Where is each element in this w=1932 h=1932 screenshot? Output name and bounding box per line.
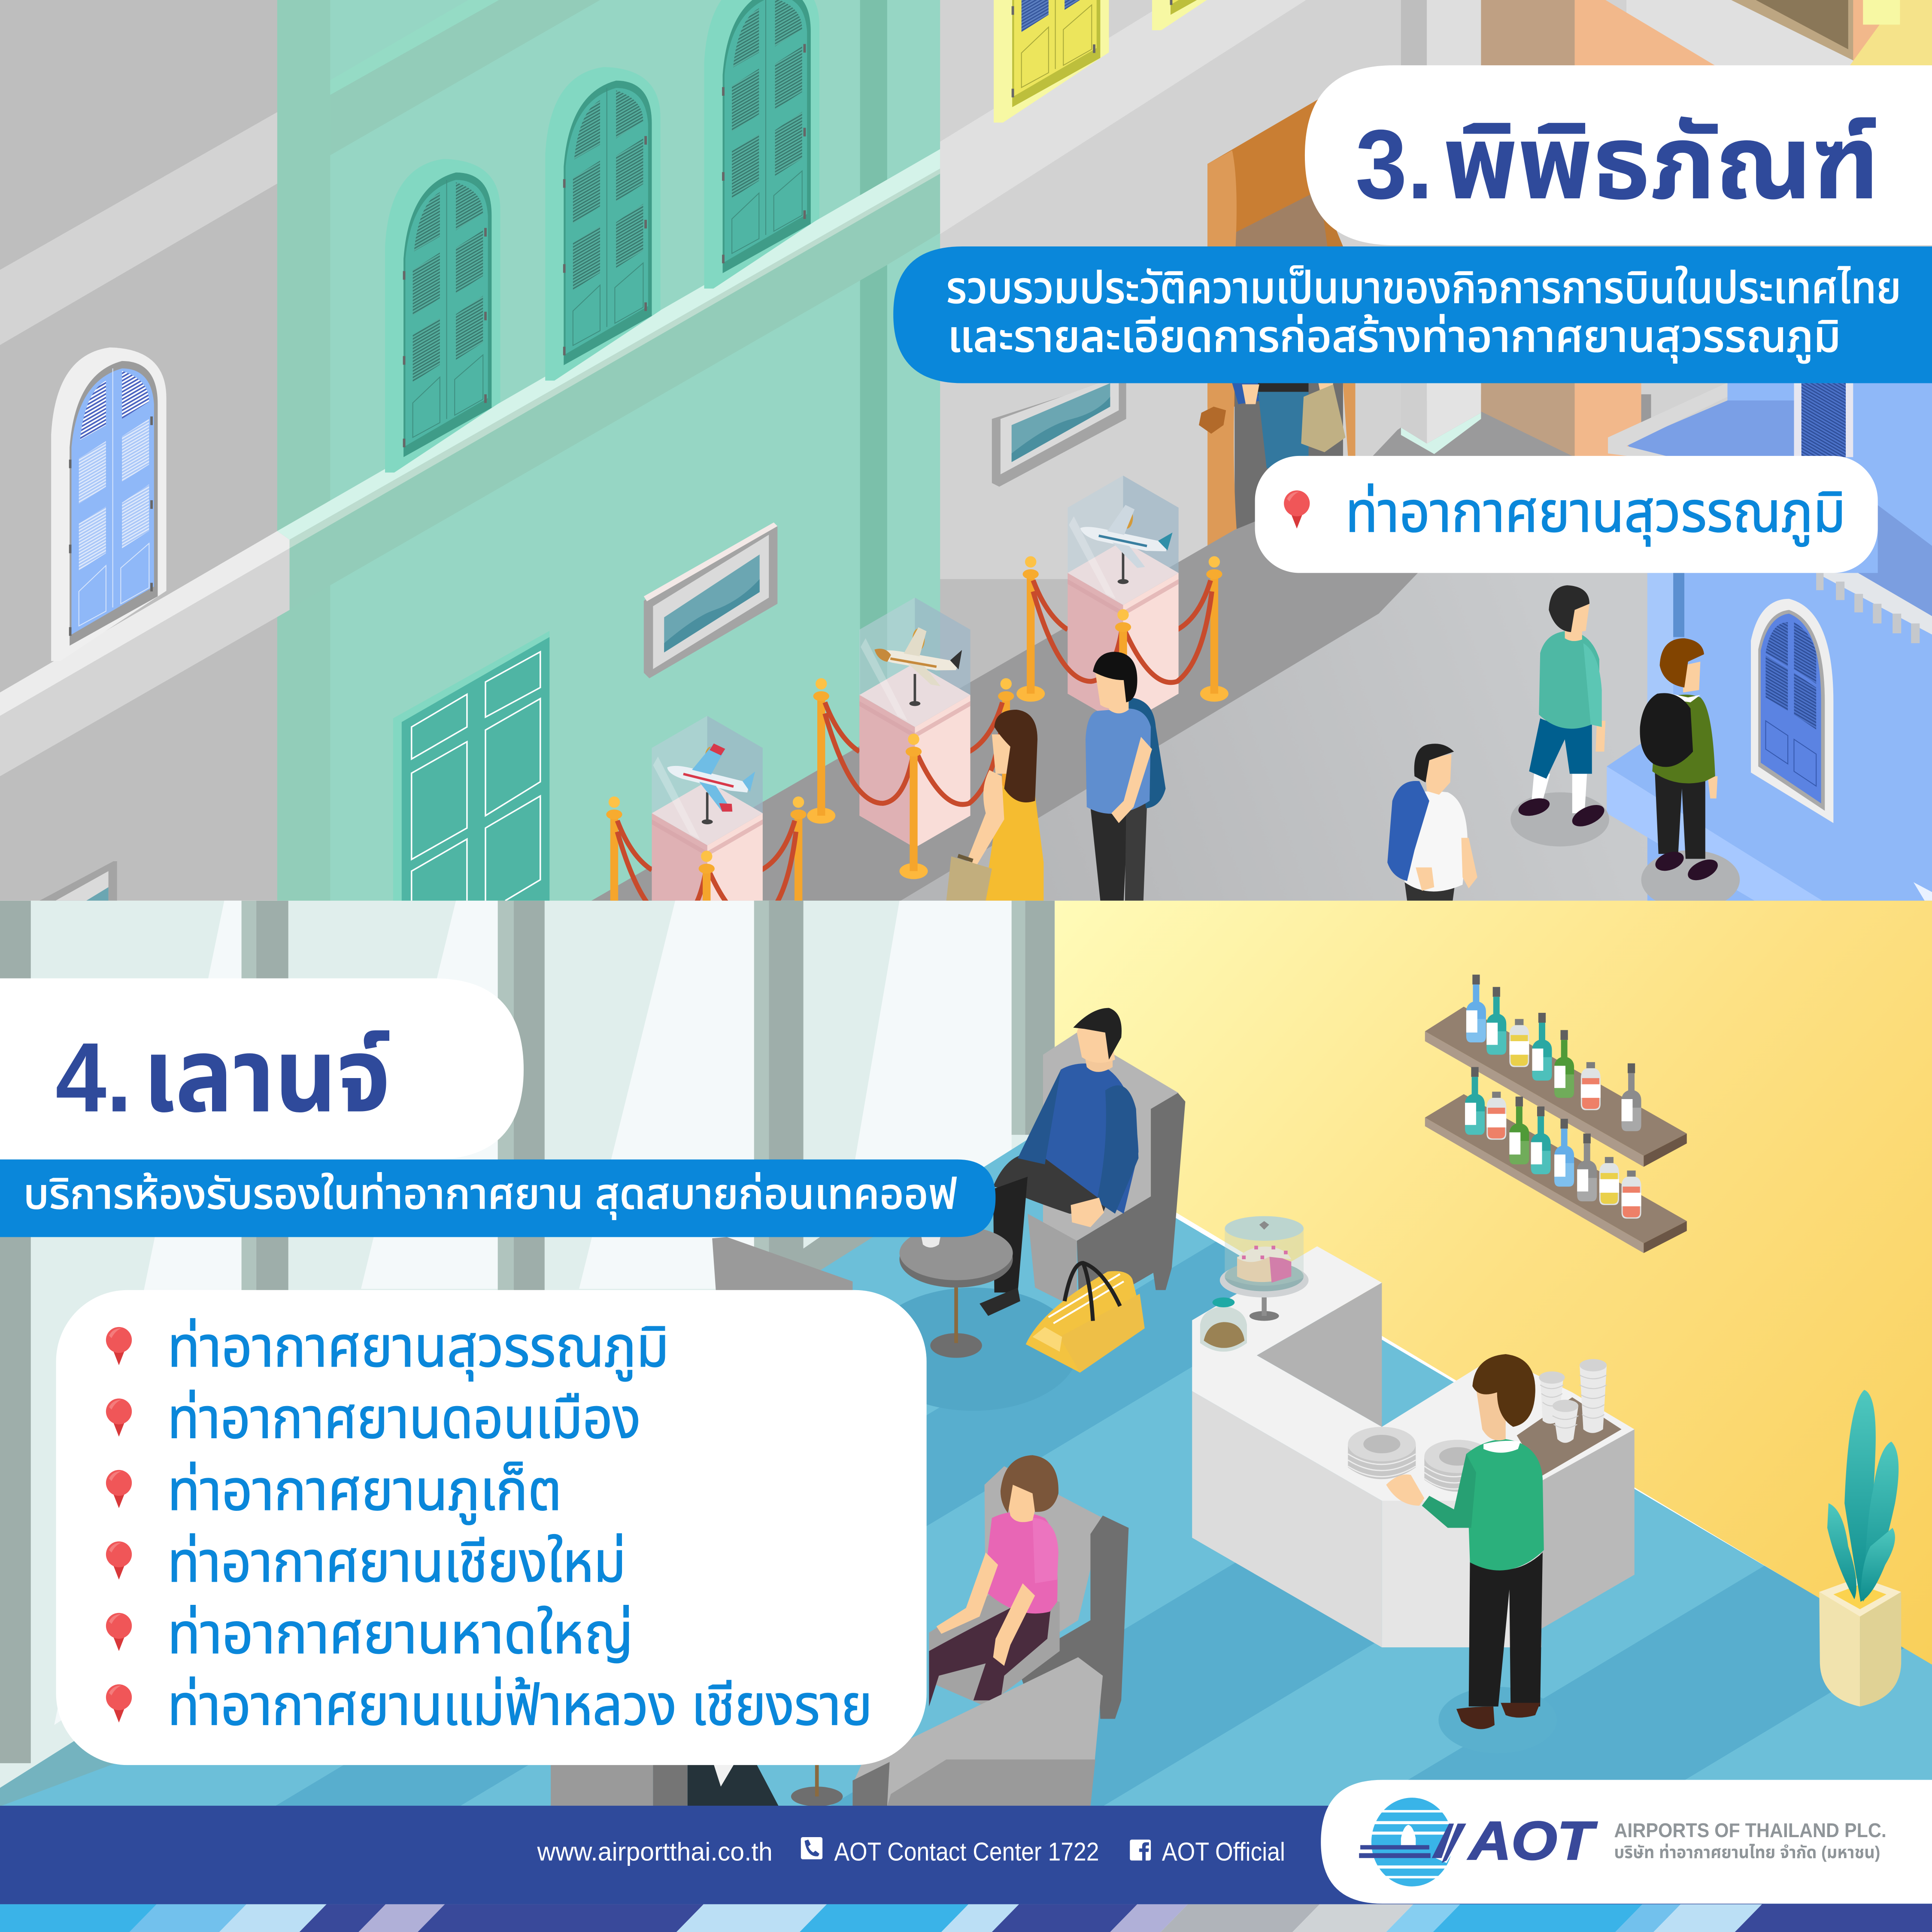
side table with cup	[899, 1226, 1013, 1358]
location name: ท่าอากาศยานสุวรรณภูมิ	[1346, 480, 1846, 547]
AOT logo emblem	[1356, 1798, 1468, 1886]
yellow duffel bag	[1026, 1263, 1145, 1373]
windows: arched shutters on grey, mint and yellow walls	[51, 0, 1267, 661]
heading: museum: พิพิธภัณฑ์	[1443, 105, 1879, 221]
visitor: man in teal shirt	[1516, 585, 1607, 831]
right grey wall	[940, 0, 1932, 579]
museum location card	[1255, 456, 1878, 573]
icon: phone	[801, 1837, 822, 1859]
list item: Mae Fah Luang Chiang Rai: ท่าอากาศยานแม่ฟ้าหลวง เชียงราย	[167, 1673, 872, 1737]
lounge airport list card	[56, 1290, 927, 1765]
doorway	[1207, 95, 1356, 568]
column and peach block	[1356, 383, 1651, 474]
green double door	[393, 631, 549, 901]
visitor: man in blue shirt with backpack	[1086, 652, 1166, 901]
exhibit C: jet model	[1016, 476, 1228, 755]
section number 3: 3.	[1356, 109, 1433, 219]
armchair with seated man in blue	[980, 1008, 1185, 1316]
grey sofa behind list card	[712, 1237, 852, 1309]
mint building wall	[277, 0, 955, 901]
section number 4: 4.	[55, 1022, 132, 1133]
icon: map pin	[1284, 490, 1310, 529]
company name Thai: บริษัท ท่าอากาศยานไทย จำกัด (มหาชน)	[1614, 1843, 1880, 1862]
description text: บริการห้องรับรองในท่าอากาศยาน สุดสบายก่อนเทคออฟ	[24, 1170, 957, 1220]
framed pictures	[39, 376, 1126, 901]
lounge title pill	[0, 978, 524, 1160]
facebook page name: AOT Official	[1162, 1837, 1285, 1866]
grey building wall	[0, 112, 290, 776]
list item: Don Mueang: ท่าอากาศยานดอนเมือง	[167, 1386, 641, 1450]
exhibit B: tan jet model	[807, 598, 1020, 879]
man at counter in green sweater	[1386, 1354, 1544, 1729]
list item: Phuket: ท่าอากาศยานภูเก็ต	[167, 1458, 562, 1525]
blue building	[1607, 573, 1932, 905]
panel: lounge scene	[0, 812, 1932, 1806]
exhibit A: red and blue jet model	[600, 716, 813, 996]
tray with cups	[1517, 1359, 1622, 1476]
museum exhibits with stanchions	[600, 476, 1228, 996]
visitor: woman in yellow dress	[946, 710, 1043, 901]
museum description bar	[893, 246, 1932, 383]
glass windows with reflections	[0, 901, 1055, 1806]
bottom colour stripes	[0, 1904, 1932, 1932]
visitor shadow spots	[1510, 792, 1740, 909]
list item: Suvarnabhumi: ท่าอากาศยานสุวรรณภูมิ	[167, 1315, 669, 1382]
lounge description bar	[0, 1160, 995, 1237]
upper blue rooftop	[1608, 383, 1932, 643]
top shelf	[1425, 1007, 1687, 1167]
museum title pill	[1305, 65, 1932, 245]
icon: facebook	[1130, 1840, 1151, 1861]
logo panel	[1321, 1780, 1932, 1904]
AOT wordmark: AOT	[1467, 1810, 1597, 1871]
blue striped floor	[0, 812, 1932, 1806]
panel: museum scene	[0, 0, 1932, 996]
plate stacks	[1348, 1427, 1491, 1492]
bottom shelf	[1425, 1094, 1687, 1253]
brown window and far-right yellow roof	[1731, 0, 1932, 68]
cookie jar	[1200, 1297, 1247, 1352]
wall shelves with bottles	[1425, 975, 1687, 1253]
cake under glass dome	[1220, 1216, 1309, 1321]
floor	[591, 456, 1651, 901]
potted plant	[1819, 1390, 1901, 1707]
bottom furniture and seated legs	[551, 1759, 843, 1806]
company name English: AIRPORTS OF THAILAND PLC.	[1614, 1819, 1887, 1841]
person in doorway with shopping bags	[1199, 383, 1346, 468]
list item: Chiang Mai: ท่าอากาศยานเชียงใหม่	[167, 1530, 626, 1594]
heading: lounge: เลานจ์	[143, 1018, 391, 1134]
description text line 2: และรายละเอียดการก่อสร้างท่าอากาศยานสุวรรณภูมิ	[947, 311, 1841, 363]
visitor: boy in white shirt	[1387, 744, 1477, 901]
footer bar	[0, 1806, 1932, 1904]
yellow wall	[1055, 901, 1932, 1666]
website: www.airportthai.co.th	[537, 1837, 773, 1866]
armchair with seated woman in pink	[929, 1455, 1128, 1719]
list item: Hat Yai: ท่าอากาศยานหาดใหญ่	[167, 1602, 633, 1665]
refreshment counter	[1192, 1246, 1635, 1647]
visitor: man with black backpack	[1640, 638, 1721, 884]
foreground armchair	[852, 1657, 1103, 1806]
contact center: AOT Contact Center 1722	[834, 1837, 1099, 1866]
